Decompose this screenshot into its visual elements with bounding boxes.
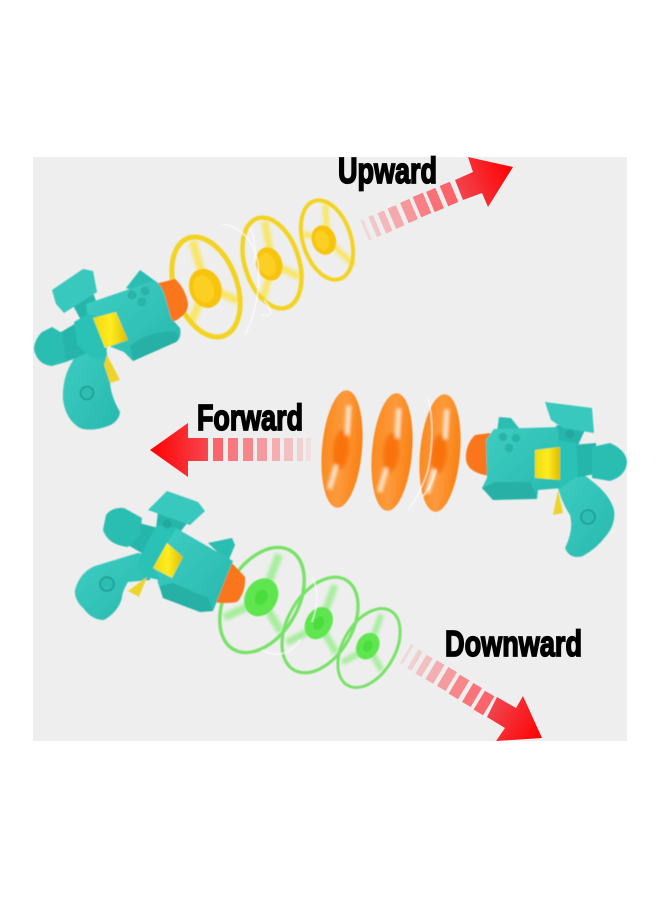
disc: green 3	[325, 598, 413, 698]
orange discs	[317, 388, 465, 514]
motion swirl: green discs	[262, 577, 317, 654]
disc: green 1	[202, 533, 322, 667]
gun 3 grip	[75, 553, 152, 620]
gun 2: forward	[466, 402, 627, 557]
arrow head: upward	[455, 157, 513, 207]
dashes: downward	[400, 644, 494, 715]
dashes: forward	[213, 438, 311, 461]
gun 2 fin	[497, 417, 522, 432]
arrow: upward	[360, 157, 513, 241]
gun 1 nozzle	[155, 279, 188, 322]
gun 1 sight post	[70, 290, 100, 322]
infographic: flying disc launcher directions	[33, 156, 628, 741]
gun 3 fin	[208, 538, 235, 562]
gun 2 dots	[499, 433, 520, 452]
arrow: downward	[400, 644, 542, 741]
disc: orange 3	[415, 392, 465, 514]
gun 2 lower shell	[482, 482, 537, 500]
gun 3 nozzle	[212, 561, 245, 603]
gun 2 neck	[572, 443, 596, 478]
disc: orange 2	[367, 391, 417, 513]
disc: yellow 1	[159, 228, 253, 346]
gun 3 neck	[128, 520, 158, 558]
motion swirl: orange discs	[408, 397, 436, 510]
grey background panel	[33, 157, 627, 741]
gun 1 dots	[128, 286, 150, 306]
gun 2 sight post	[556, 425, 585, 445]
gun 3 collar	[138, 525, 177, 580]
gun 1 fin	[126, 270, 158, 296]
gun 1 neck	[56, 322, 90, 362]
gun 3 sight	[148, 491, 205, 525]
gun 1 button	[80, 386, 94, 400]
gun 3 yellow cylinder	[153, 543, 183, 578]
disc: yellow 3	[292, 194, 362, 286]
gun 3 body	[155, 527, 233, 612]
gun 2 knob	[592, 443, 627, 481]
gun 2 nozzle	[466, 433, 490, 476]
gun 1 lower shell	[130, 332, 178, 361]
gun 2 trigger	[553, 490, 563, 515]
disc: green 2	[266, 564, 374, 686]
gun 3 lower shell	[160, 583, 213, 612]
arrow: forward	[150, 423, 311, 477]
arrow head: downward	[487, 696, 542, 741]
dashes: upward	[360, 182, 458, 241]
gun 2 body	[482, 427, 562, 500]
gun 1 collar	[74, 314, 108, 358]
gun 1: upward	[34, 269, 188, 430]
gun 3 sight post	[156, 512, 188, 535]
gun 3 knob	[103, 508, 142, 547]
gun 2 button	[581, 510, 595, 524]
gun 1 grip	[63, 340, 120, 430]
gun 3 button	[100, 577, 114, 591]
label: Downward: Downward	[445, 623, 582, 664]
gun 1 body	[86, 281, 180, 361]
gun 3 sight bolt	[162, 520, 172, 528]
gun 3: downward	[75, 491, 245, 620]
gun 2 sight bolt	[566, 430, 574, 438]
green discs	[202, 533, 413, 698]
gun 2 grip	[556, 470, 614, 557]
disc: orange 1	[317, 388, 367, 510]
disc: yellow 2	[232, 210, 312, 316]
yellow discs	[159, 194, 362, 346]
gun 1 knob	[34, 327, 66, 366]
gun 1 trigger	[104, 355, 120, 383]
label: Forward: Forward	[197, 397, 303, 438]
gun 2 yellow cylinder	[535, 447, 560, 480]
motion swirl: yellow discs	[222, 224, 271, 335]
gun 1 sight	[52, 269, 97, 313]
gun 3 trigger	[128, 577, 147, 597]
gun 2 sight	[545, 402, 594, 433]
gun 1 yellow cylinder	[93, 312, 128, 348]
label: Upward: Upward	[338, 150, 437, 191]
gun 2 collar	[556, 440, 578, 488]
arrow head: forward	[150, 423, 208, 477]
